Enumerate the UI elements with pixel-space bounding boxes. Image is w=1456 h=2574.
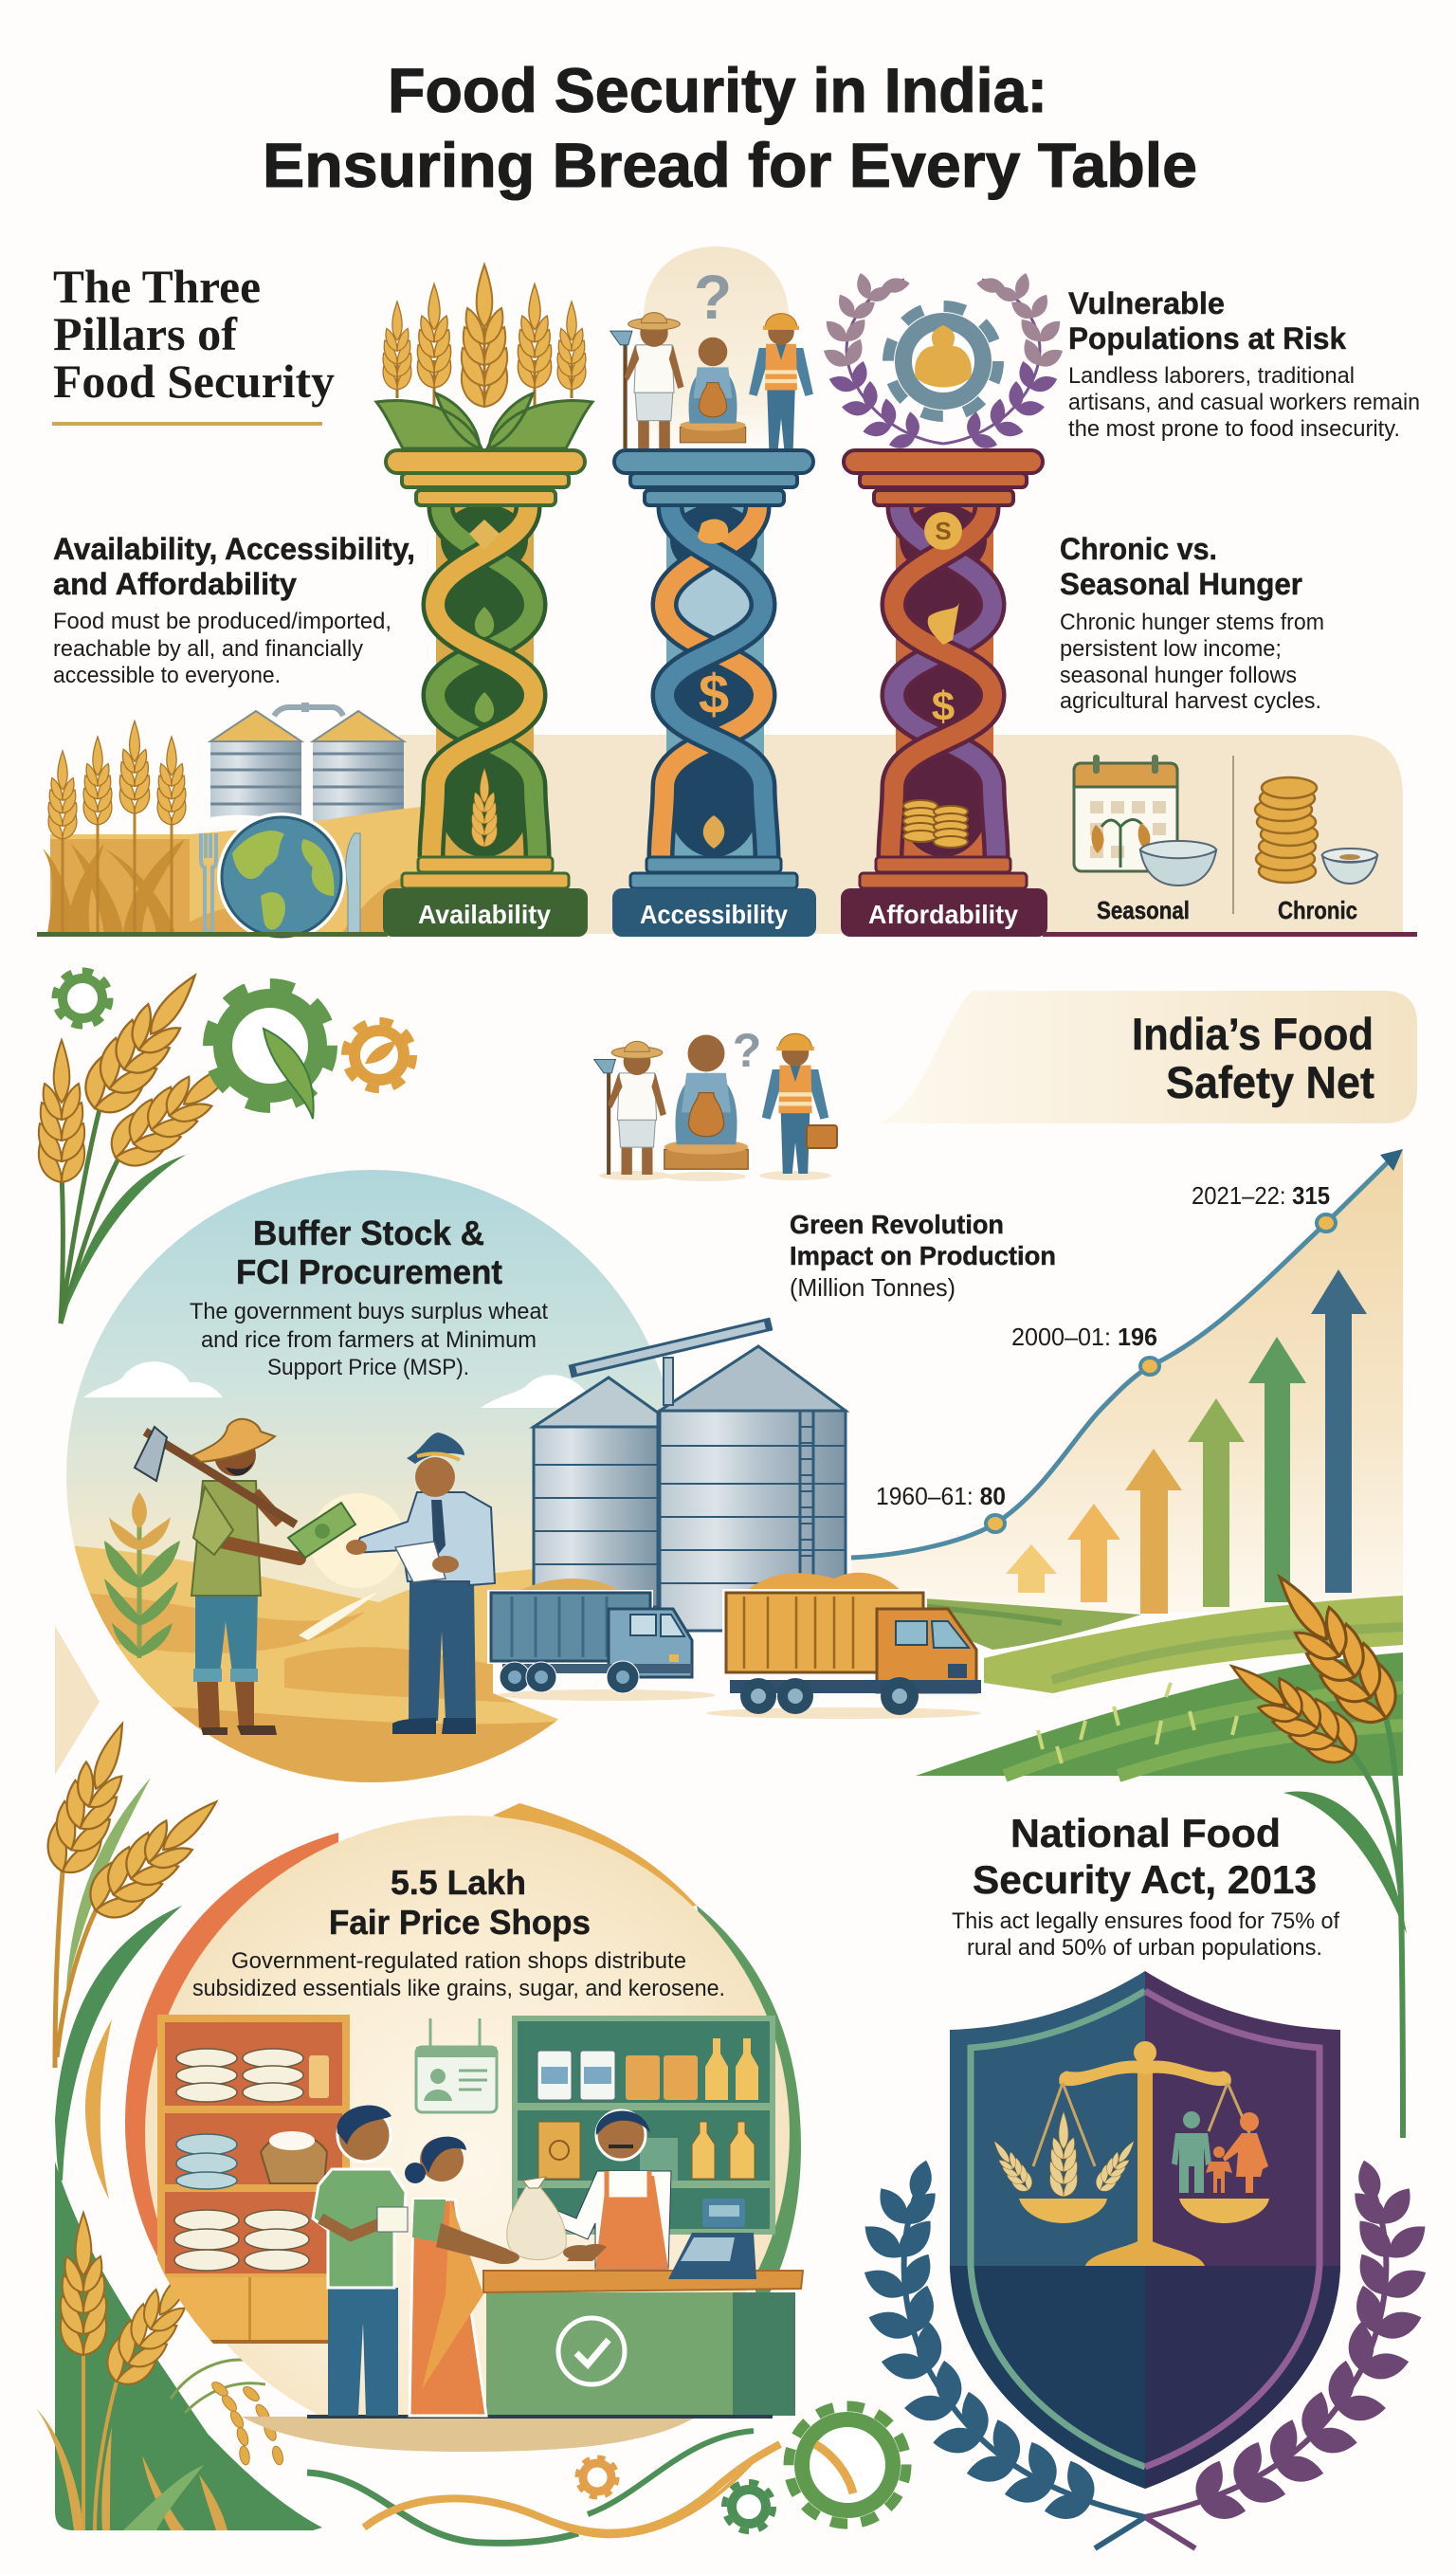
icon: orange truck xyxy=(706,1573,981,1719)
ration card sign xyxy=(416,2018,497,2112)
icon: chronic coins and bowl xyxy=(1255,777,1377,884)
data points xyxy=(986,1214,1336,1532)
pillar 3: affordability xyxy=(820,271,1066,937)
panel: fair price shops circle xyxy=(125,1803,803,2452)
laurel: left blue xyxy=(858,2159,1145,2548)
heading: the three pillars xyxy=(52,260,335,426)
heading: the three pillars: Food Security xyxy=(53,355,335,408)
area under curve xyxy=(851,1149,1403,1612)
clouds xyxy=(83,1361,223,1397)
text: national food security act: National Food xyxy=(1010,1811,1281,1855)
text: vulnerable populations: Vulnerable xyxy=(1068,286,1225,320)
golden hills xyxy=(74,1545,607,1782)
title: Food Security in India: xyxy=(388,55,1047,125)
shop text xyxy=(192,1863,725,2001)
buffer stock text: The government buys surplus wheat xyxy=(190,1299,548,1324)
text: chronic vs seasonal: agricultural harvest cycles. xyxy=(1060,688,1321,714)
icons: three vulnerable workers xyxy=(594,1024,837,1181)
buffer stock text: Buffer Stock & xyxy=(253,1214,484,1252)
data labels: 2021–22: 315 xyxy=(1192,1181,1330,1210)
beige ground band xyxy=(399,735,1403,934)
text: vulnerable populations xyxy=(1068,286,1420,442)
plant xyxy=(104,1492,180,1658)
chart title xyxy=(790,1210,1056,1302)
shield xyxy=(950,1971,1340,2489)
ground lines xyxy=(37,932,1417,937)
label xyxy=(612,888,816,937)
decoration: gears and wheat top-left xyxy=(39,959,413,1324)
text: chronic vs seasonal: seasonal hunger follows xyxy=(1060,663,1297,688)
label xyxy=(383,888,588,937)
pillar 2: accessibility: ? xyxy=(694,262,732,332)
capital and base xyxy=(844,450,1043,473)
illustration: silos xyxy=(534,1325,846,1631)
pillar 3: affordability: $ xyxy=(932,684,955,730)
chart title: (Million Tonnes) xyxy=(790,1273,956,1302)
three workers xyxy=(610,313,813,448)
officer xyxy=(346,1433,495,1734)
laurel and gear with wheat xyxy=(820,271,1066,451)
buffer stock text: and rice from farmers at Minimum xyxy=(201,1327,537,1353)
text: national food security act: Security Act, 2013 xyxy=(973,1857,1317,1902)
faint tan triangle xyxy=(55,1626,100,1775)
text: national food security act: This act legally ensures food for 75% of xyxy=(952,1908,1339,1934)
panel: buffer stock circle xyxy=(55,1168,692,1792)
panel: three pillars xyxy=(37,246,1420,941)
text: vulnerable populations: Populations at Risk xyxy=(1068,321,1346,356)
label: Availability xyxy=(418,900,551,929)
ring arcs xyxy=(125,1803,801,2313)
money xyxy=(288,1503,355,1558)
customer woman xyxy=(405,2137,519,2416)
decoration: wheat and stem right xyxy=(1218,1560,1409,2138)
divider xyxy=(1232,756,1234,914)
text: chronic vs seasonal xyxy=(1060,532,1324,714)
pillar 3: affordability: S xyxy=(935,517,952,545)
text: chronic vs seasonal: Chronic hunger stems from xyxy=(1060,610,1324,635)
banner: India's food safety net xyxy=(877,991,1417,1123)
rising arrows xyxy=(1006,1269,1367,1614)
illustration: wheat field, silos and globe xyxy=(43,703,446,941)
buffer stock text xyxy=(190,1214,548,1380)
decoration: wheat and green panel lower-left xyxy=(36,1714,322,2530)
rice sack xyxy=(507,2185,566,2260)
counter xyxy=(307,2271,803,2419)
family figures xyxy=(1172,2111,1268,2193)
banner: India's food safety net: India’s Food xyxy=(1132,1009,1374,1059)
cash register xyxy=(668,2199,756,2279)
chart: green revolution production xyxy=(790,1149,1403,1614)
data labels xyxy=(876,1181,1330,1510)
decoration: bottom waves and gears xyxy=(307,2406,906,2543)
pillar 2: accessibility xyxy=(610,246,816,937)
text: availability, accessibility, affordability: and Affordability xyxy=(53,567,297,601)
title xyxy=(263,55,1197,200)
icons: three vulnerable workers: ? xyxy=(733,1024,761,1077)
capital and base xyxy=(614,450,813,473)
text: national food security act: rural and 50% of urban populations. xyxy=(967,1935,1322,1961)
chart title: Green Revolution xyxy=(790,1210,1004,1239)
text: chronic vs seasonal: persistent low income; xyxy=(1060,636,1282,662)
text: vulnerable populations: Landless laborers, traditional xyxy=(1068,363,1355,389)
pillar 1: availability xyxy=(376,265,592,937)
heading: the three pillars: The Three xyxy=(53,260,261,313)
text: national food security act xyxy=(952,1811,1339,1961)
icon: seasonal calendar and bowl xyxy=(1074,755,1216,885)
icon: blue truck xyxy=(487,1579,716,1701)
leaves xyxy=(376,393,592,448)
farmer xyxy=(135,1419,300,1735)
banner: India's food safety net: Safety Net xyxy=(1166,1057,1374,1107)
shop text: Fair Price Shops xyxy=(329,1903,591,1942)
text: availability, accessibility, affordability: reachable by all, and financially xyxy=(53,636,363,662)
buffer stock text: FCI Procurement xyxy=(236,1252,502,1291)
text: availability, accessibility, affordability xyxy=(53,532,415,688)
label: seasonal: Seasonal xyxy=(1097,896,1190,924)
text: vulnerable populations: the most prone to food insecurity. xyxy=(1068,416,1400,442)
white road under trucks xyxy=(493,1664,607,1720)
text: availability, accessibility, affordability: accessible to everyone. xyxy=(53,663,281,688)
column xyxy=(666,505,764,856)
label: Affordability xyxy=(868,900,1018,929)
pillar 2: accessibility: $ xyxy=(699,664,729,725)
chart title: Impact on Production xyxy=(790,1241,1056,1270)
circle background xyxy=(145,1816,790,2451)
customer man xyxy=(313,2106,408,2416)
heading: the three pillars: Pillars of xyxy=(53,307,238,360)
wheat crown xyxy=(383,265,586,417)
text: availability, accessibility, affordability: Availability, Accessibility, xyxy=(53,532,415,566)
label: chronic: Chronic xyxy=(1278,896,1357,924)
shop text: Government-regulated ration shops distribute xyxy=(231,1948,686,1974)
column xyxy=(896,505,993,856)
text: availability, accessibility, affordability: Food must be produced/imported, xyxy=(53,609,391,634)
arch with question mark xyxy=(644,246,789,450)
title: Ensuring Bread for Every Table xyxy=(263,130,1197,200)
shopkeeper xyxy=(489,2110,671,2269)
text: chronic vs seasonal: Chronic vs. xyxy=(1060,532,1217,566)
left shelves with sacks xyxy=(161,2018,351,2344)
label: Accessibility xyxy=(640,900,788,929)
buffer stock text: Support Price (MSP). xyxy=(267,1355,469,1380)
label xyxy=(841,888,1047,937)
data labels: 1960–61: 80 xyxy=(876,1482,1006,1510)
column xyxy=(436,505,534,856)
right shelves with goods xyxy=(515,2018,773,2232)
text: vulnerable populations: artisans, and casual workers remain xyxy=(1068,390,1420,415)
data labels: 2000–01: 196 xyxy=(1011,1323,1157,1351)
shop text: subsidized essentials like grains, sugar, and kerosene. xyxy=(192,1976,725,2001)
shop text: 5.5 Lakh xyxy=(391,1863,526,1902)
capital and base xyxy=(386,450,585,473)
illustration: green fields xyxy=(833,1592,1403,1776)
arrow tip xyxy=(1380,1149,1403,1171)
scales of justice xyxy=(987,2041,1269,2266)
trend line xyxy=(851,1157,1393,1558)
text: chronic vs seasonal: Seasonal Hunger xyxy=(1060,567,1302,601)
coins in column xyxy=(903,800,968,848)
laurel: right purple xyxy=(1145,2159,1432,2548)
